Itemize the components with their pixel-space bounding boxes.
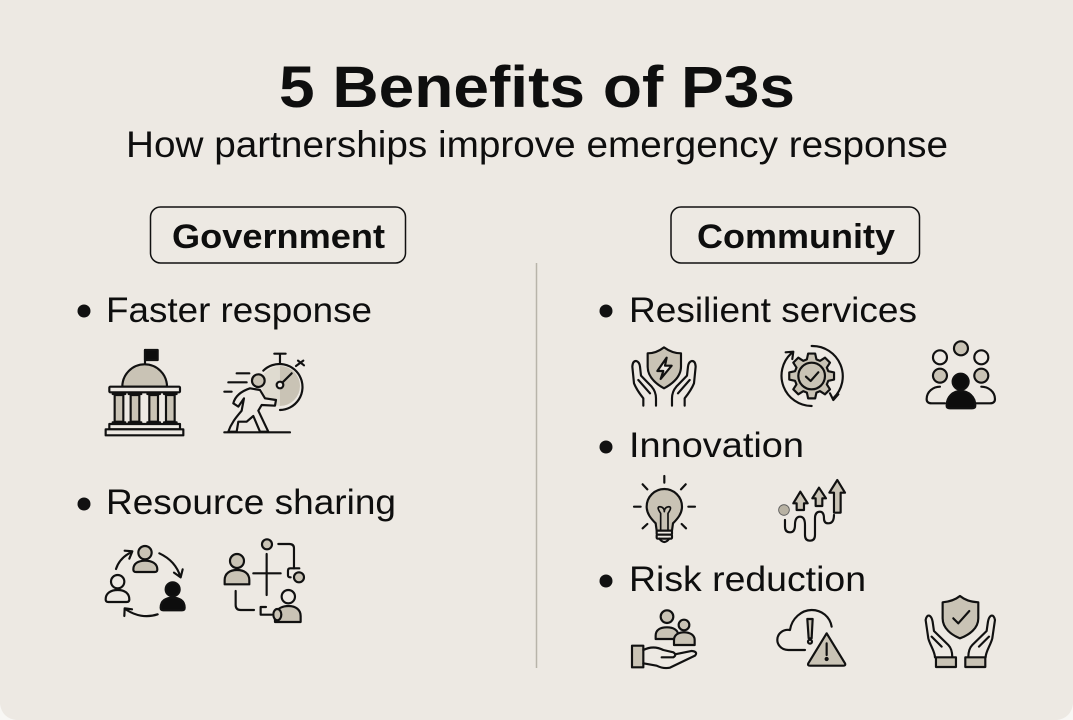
- heading: Government: [150, 207, 406, 263]
- icon: community group: [927, 341, 995, 408]
- subtitle: How partnerships improve emergency response: [126, 124, 948, 165]
- bullet: Innovation: Innovation: [629, 426, 804, 465]
- icon: hand supporting people: [632, 610, 696, 668]
- bullet: Resilient services: Resilient services: [629, 291, 917, 330]
- icon: winding path to growth arrows: [779, 480, 845, 541]
- title: 5 Benefits of P3s: [279, 55, 795, 120]
- heading: Community: [671, 207, 920, 263]
- icon: gear with check and cycle arrows: [782, 346, 843, 406]
- icon: cloud with warning triangle: [777, 610, 845, 666]
- bullet: Risk reduction: Risk reduction: [629, 560, 866, 599]
- icon: connected team network: [225, 539, 304, 622]
- icon: light bulb: [634, 476, 695, 542]
- bullet: Resource sharing: Resource sharing: [106, 483, 396, 522]
- icon: hands protecting shield: [926, 596, 995, 667]
- icon: government building: [106, 350, 183, 435]
- icon: runner and stopwatch: [224, 354, 304, 432]
- icon: hands holding energy shield: [632, 347, 696, 406]
- heading: Government: Government: [172, 218, 385, 256]
- heading: Community: Community: [697, 218, 895, 256]
- icon: people sharing in a cycle: [106, 546, 185, 616]
- bullet: Faster response: Faster response: [106, 291, 372, 330]
